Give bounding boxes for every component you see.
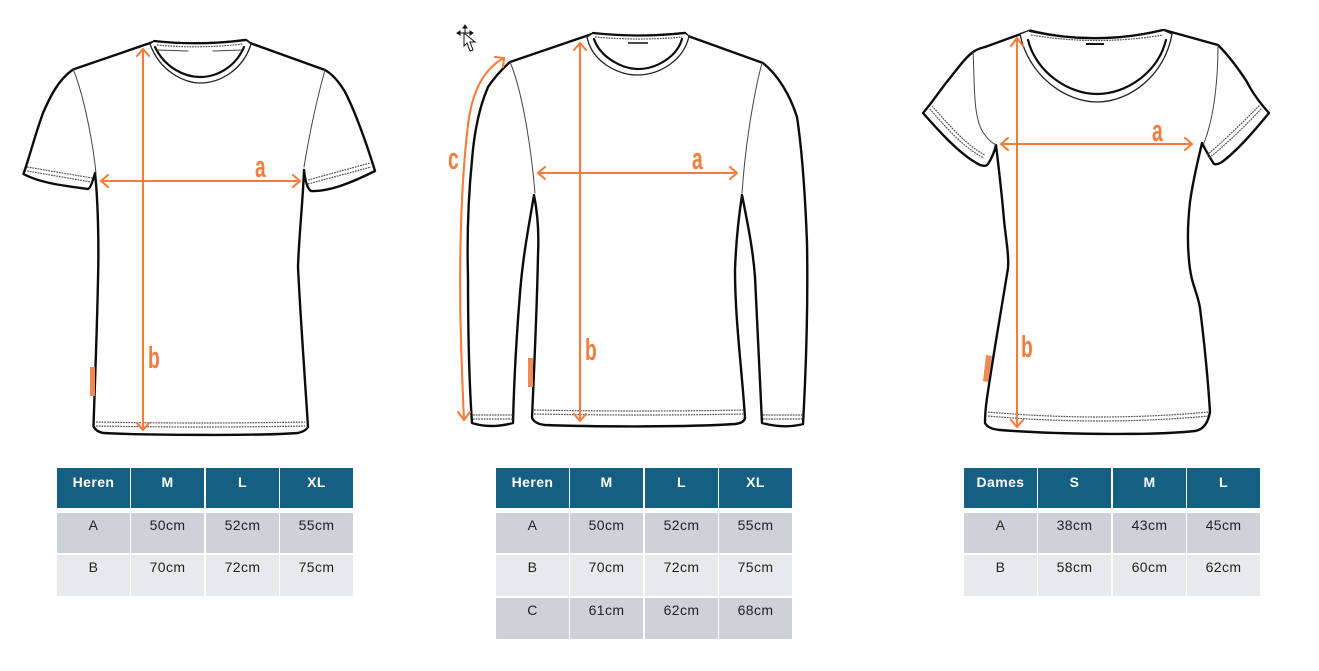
label a: a bbox=[255, 151, 266, 184]
table: heren long sleeve: 55cm bbox=[738, 517, 773, 533]
brand tag bbox=[528, 358, 533, 387]
table: heren long sleeve: 50cm bbox=[589, 517, 624, 533]
header row bbox=[496, 468, 792, 508]
arrow b bbox=[574, 43, 586, 421]
table: heren long sleeve: L bbox=[677, 474, 686, 490]
table: dames: 60cm bbox=[1132, 559, 1167, 575]
armhole seams bbox=[973, 45, 1218, 145]
stitching bbox=[930, 105, 1262, 421]
row A bbox=[57, 513, 353, 553]
table: heren short sleeve: 70cm bbox=[150, 559, 185, 575]
brand tag bbox=[90, 367, 95, 396]
label c: c bbox=[448, 143, 459, 176]
table: heren short sleeve: 75cm bbox=[299, 559, 334, 575]
arrow c bbox=[458, 57, 504, 420]
table: heren long sleeve: Heren bbox=[512, 474, 553, 490]
table: dames: L bbox=[1219, 474, 1228, 490]
table: heren long sleeve: M bbox=[600, 474, 613, 490]
table: dames: 58cm bbox=[1057, 559, 1092, 575]
table: heren long sleeve bbox=[496, 468, 792, 639]
brand tag bbox=[983, 355, 992, 382]
long sleeve shirt bbox=[448, 33, 807, 426]
table: dames bbox=[964, 468, 1260, 596]
table: heren short sleeve bbox=[57, 468, 353, 596]
table: dames: 62cm bbox=[1206, 559, 1241, 575]
arrow a bbox=[1001, 138, 1192, 150]
table: dames: S bbox=[1070, 474, 1079, 490]
row A bbox=[964, 513, 1260, 553]
table: dames: M bbox=[1143, 474, 1156, 490]
table: dames: 43cm bbox=[1132, 517, 1167, 533]
collar bbox=[587, 33, 689, 75]
table: heren long sleeve: 72cm bbox=[664, 559, 699, 575]
table: heren short sleeve: 55cm bbox=[299, 517, 334, 533]
armhole seams bbox=[510, 62, 762, 193]
table: heren long sleeve: C bbox=[527, 602, 538, 618]
row A bbox=[496, 513, 792, 553]
row B bbox=[964, 555, 1260, 596]
table: heren short sleeve: L bbox=[238, 474, 247, 490]
table: heren long sleeve: XL bbox=[746, 474, 765, 490]
table: heren long sleeve: 61cm bbox=[589, 602, 624, 618]
table: heren short sleeve: M bbox=[161, 474, 174, 490]
scoop neckline bbox=[1020, 30, 1172, 102]
row C bbox=[496, 598, 792, 639]
row B bbox=[57, 555, 353, 596]
label b: b bbox=[148, 342, 160, 375]
table: dames: 45cm bbox=[1206, 517, 1241, 533]
label b: b bbox=[585, 334, 597, 367]
table: heren long sleeve: 75cm bbox=[738, 559, 773, 575]
short sleeve men's t-shirt bbox=[24, 40, 375, 435]
table: heren long sleeve: A bbox=[528, 517, 537, 533]
table: heren long sleeve: 70cm bbox=[589, 559, 624, 575]
header row bbox=[964, 468, 1260, 508]
arrow b bbox=[1011, 38, 1023, 427]
arrow a bbox=[101, 175, 300, 187]
table: heren short sleeve: 52cm bbox=[225, 517, 260, 533]
table: dames: 38cm bbox=[1057, 517, 1092, 533]
t-shirt outline bbox=[24, 40, 375, 435]
table: heren long sleeve: B bbox=[528, 559, 537, 575]
women's t-shirt bbox=[923, 30, 1269, 434]
cursor icon bbox=[457, 25, 475, 51]
stitching bbox=[473, 410, 802, 419]
label a: a bbox=[1152, 115, 1163, 148]
table: heren long sleeve: 68cm bbox=[738, 602, 773, 618]
table: dames: A bbox=[996, 517, 1005, 533]
header row bbox=[57, 468, 353, 508]
arrow a bbox=[538, 167, 737, 179]
row B bbox=[496, 555, 792, 596]
table: heren long sleeve: 52cm bbox=[664, 517, 699, 533]
table: dames: Dames bbox=[977, 474, 1024, 490]
armhole seams bbox=[73, 69, 325, 173]
table: heren short sleeve: XL bbox=[307, 474, 326, 490]
label b: b bbox=[1021, 331, 1033, 364]
t-shirt outline bbox=[923, 30, 1269, 434]
table: heren short sleeve: Heren bbox=[73, 474, 114, 490]
table: heren short sleeve: 72cm bbox=[225, 559, 260, 575]
stitching bbox=[27, 163, 371, 427]
table: heren short sleeve: B bbox=[89, 559, 98, 575]
table: heren long sleeve: 62cm bbox=[664, 602, 699, 618]
table: dames: B bbox=[996, 559, 1005, 575]
arrow b bbox=[137, 49, 149, 430]
table: heren short sleeve: 50cm bbox=[150, 517, 185, 533]
shirt outline bbox=[468, 33, 807, 426]
table: heren short sleeve: A bbox=[89, 517, 98, 533]
collar bbox=[150, 40, 251, 83]
label a: a bbox=[692, 143, 703, 176]
